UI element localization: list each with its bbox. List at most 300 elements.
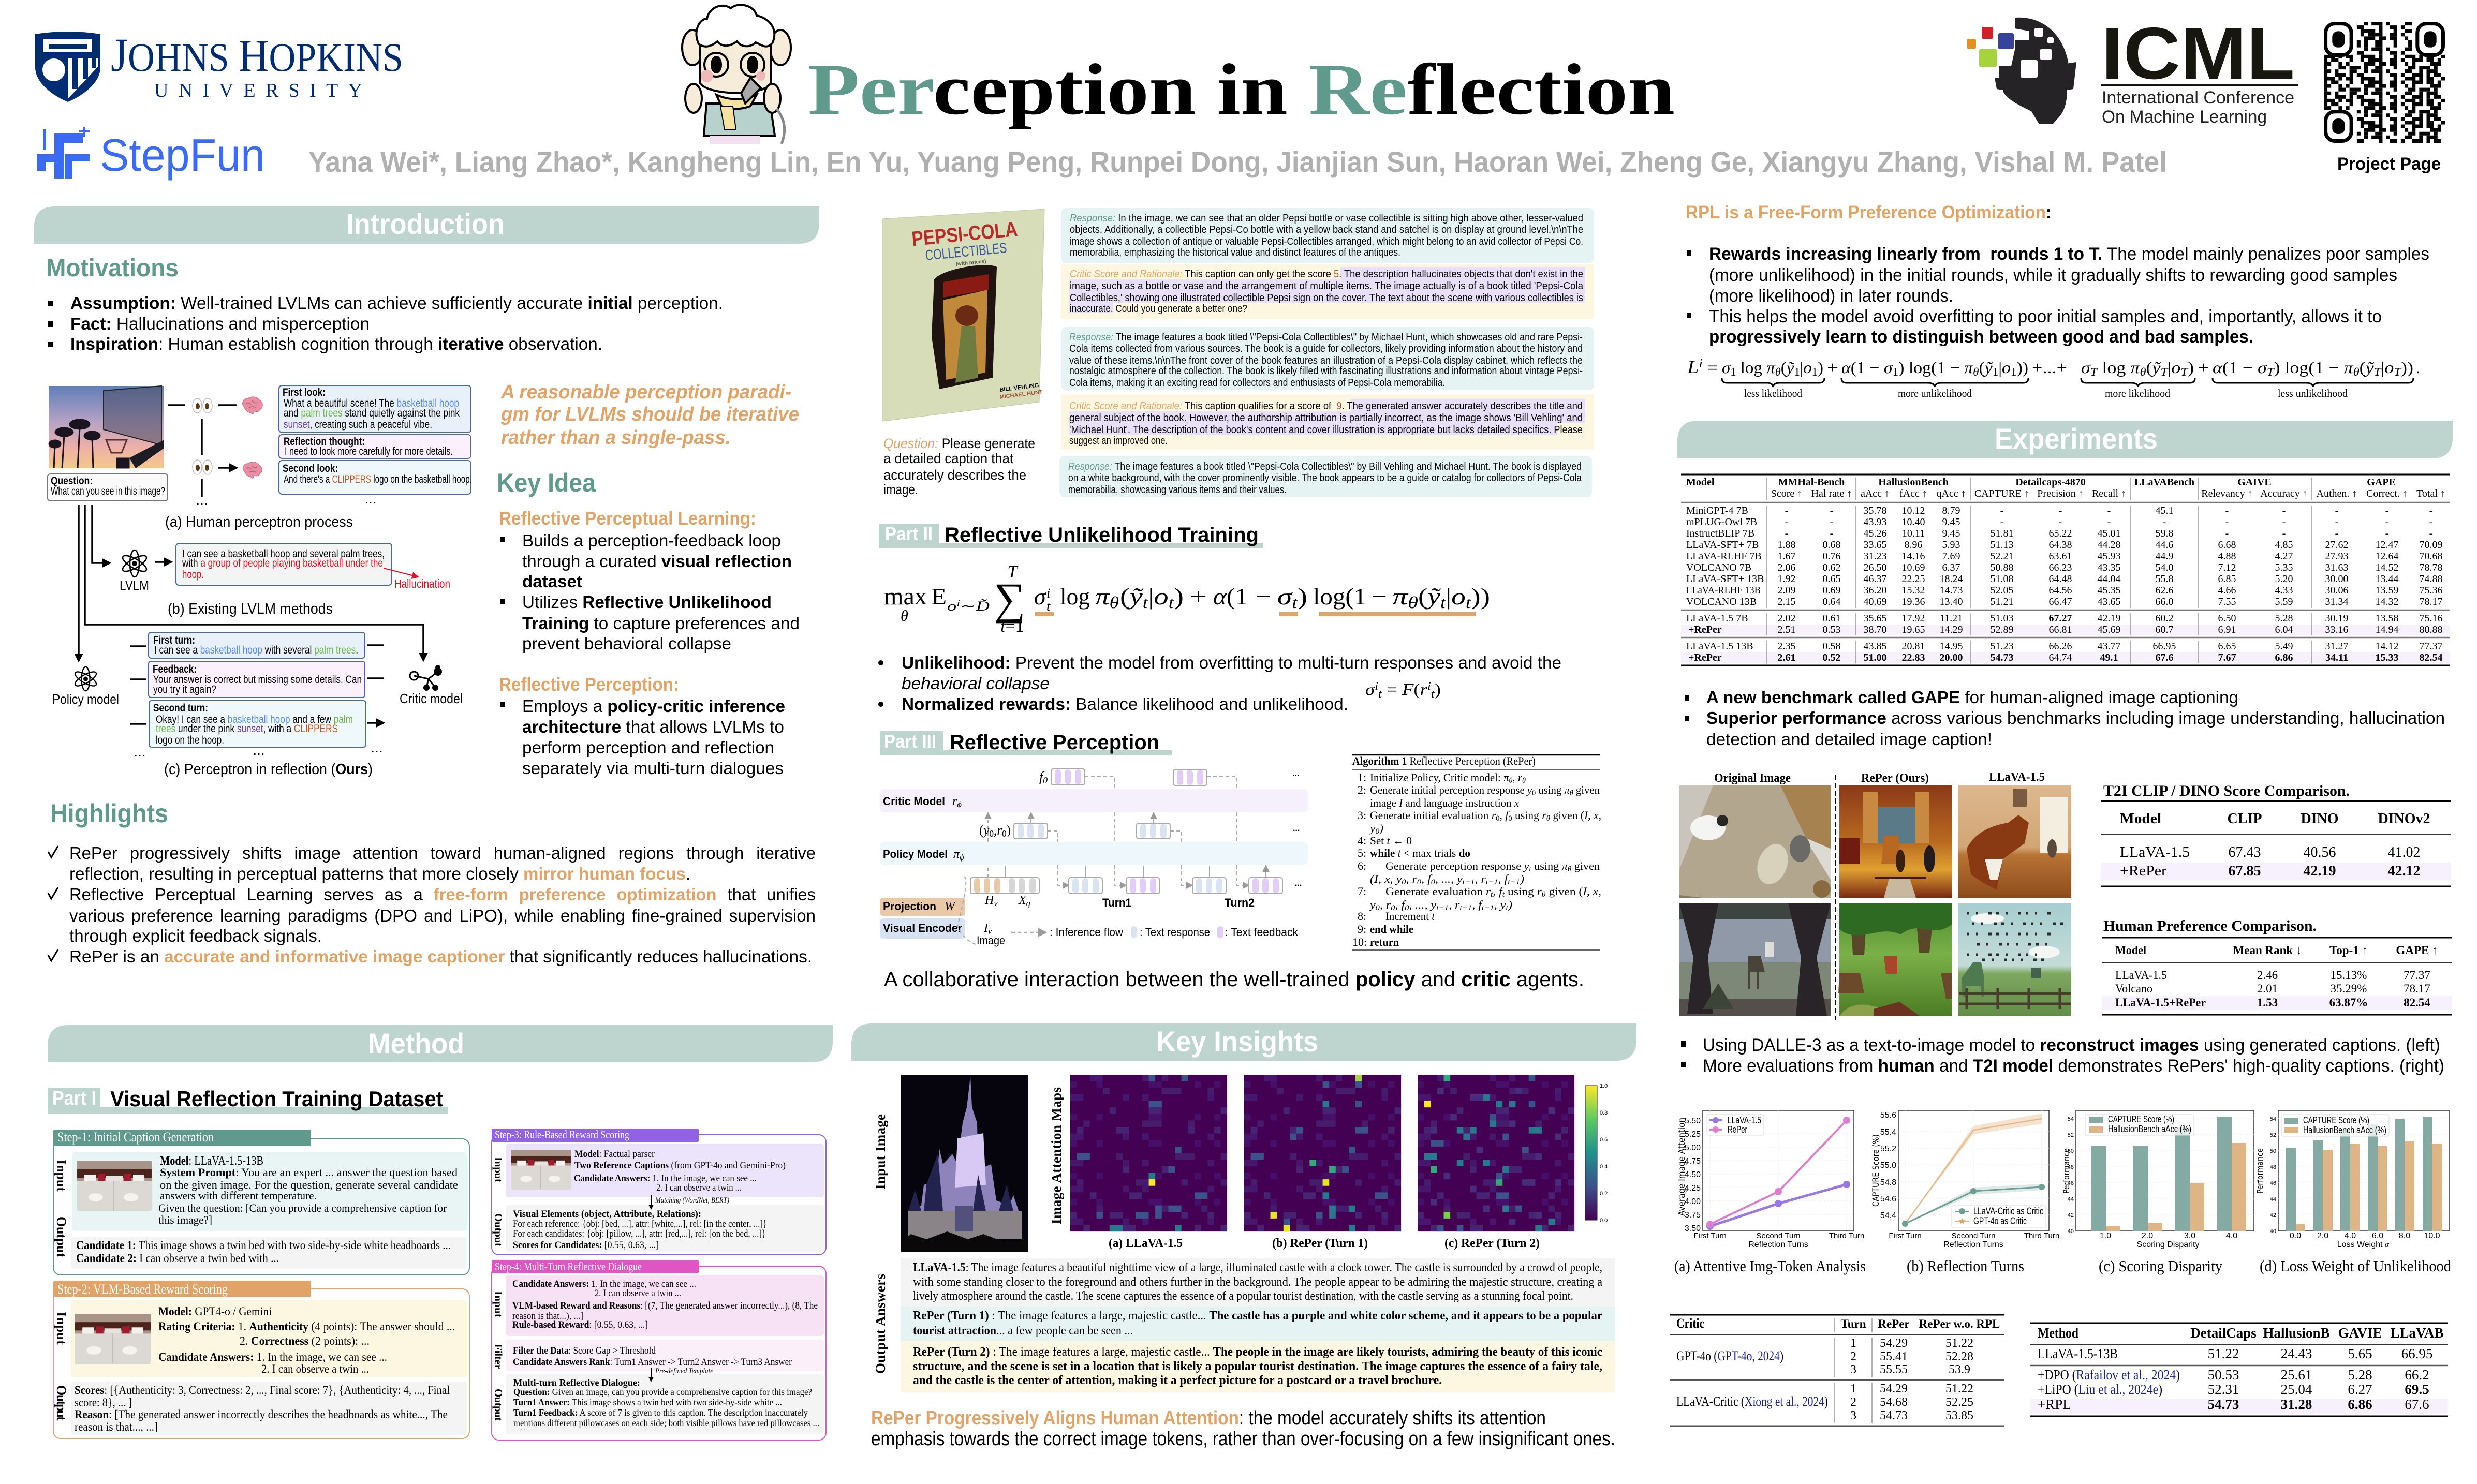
table rows: VOLCANO 13B [1686,596,1757,607]
box: first look: and palm trees stand quietly against the pink [284,407,460,419]
table rows: 70.09 [2419,539,2443,551]
bullets: unlikelihood and normalized rewards: Normalized rewards: Balance likelihood and unlikelihood. [902,694,1348,714]
table rows: 52.05 [1991,585,2013,596]
band: policy model: πϕ [953,848,964,862]
heading: Key Insights [851,1023,1636,1061]
table rows: - [2385,516,2388,528]
chart c legend: HallusionBench aAcc (%) [2108,1124,2191,1134]
table: preference method comparison: 24.43 [2281,1346,2312,1361]
table rows: 5.93 [1942,539,1960,551]
table: human preference comparison: 35.29% [2331,982,2367,995]
diagram labels: f0 [1039,769,1048,785]
panel: LLaVA-1.5 answer: with some standing closer to the foreground and others further in the background. The people appear to be admiring the majestic structure, creating a [913,1275,1602,1289]
image grid: text-to-image reconstructions [1679,770,2071,1020]
box: projection: W [945,900,956,913]
callout: reasonable paradigm: gm for LVLMs should be iterative [500,404,799,425]
step 4 labels [492,1291,505,1421]
table rows: LLaVA-1.5 13B [1686,641,1753,652]
chart a axes labels: Third Turn [1829,1231,1864,1240]
tokens [970,769,1282,894]
callout: reasonable paradigm: rather than a single-pass. [501,427,731,449]
key idea: reflective perceptual learning: prevent behavioral collapse [522,634,731,653]
response panel 2: Response: The image features a book titled \"Pepsi-Cola Collectibles\" by Michael Hunt, which showcases old and rare Pepsi- [1069,332,1583,343]
table rows: 45.69 [2097,624,2121,635]
algorithm box: image I and language instruction x [1370,796,1519,809]
step 2 output text: Scores: [{Authenticity: 3, Correctness: 2, ..., Final score: 7}, {Authenticity: 4, ..., Final [75,1384,450,1397]
chart a axes labels: Second Turn [1756,1231,1801,1240]
table rows: 2.15 [1777,596,1796,607]
chart a axes labels: Reflection Turns [1748,1240,1808,1249]
step 4 output text: Turn1 Answer: This image shows a twin bed with two side-by-side white ... [513,1397,782,1407]
chart c legend [2085,1114,2194,1135]
chart d axes labels: 52 [2270,1132,2276,1138]
box: LVLM output: with a group of people playing basketball under the [182,557,383,569]
band: policy model [880,842,1308,865]
table rows: 5.20 [2275,573,2293,585]
table: preference method comparison: 6.27 [2348,1382,2372,1397]
formula: RPL loss: α(1 − σ1) log(1 − πθ(ỹ1|o1)) [1841,358,2028,378]
table: preference method comparison: LLaVAB [2390,1325,2444,1341]
callout: hallucination [384,568,450,590]
table rows: 9.45 [1942,528,1960,539]
table rows: - [2429,505,2432,516]
table rows: - [2107,505,2111,516]
logo: StepFun [37,127,265,181]
table header: aAcc ↑ [1861,488,1890,499]
table: preference method comparison: +DPO (Rafailov et al., 2024) [2038,1367,2180,1383]
rotated labels: Image Attention Maps [1049,1087,1064,1224]
box: first turn: I can see a basketball hoop with several palm trees. [154,644,358,656]
table: critic comparison: 53.85 [1945,1409,1973,1422]
table rows: 13.40 [1940,596,1963,607]
panel: RePer turn 2 answer: and the castle is the center of attention, making it a perfect picture for a postcard or a travel brochure. [913,1374,1442,1387]
table rows: 14.73 [1940,585,1963,596]
ellipses in diagram: ... [371,739,383,755]
box: reflection thought: Reflection thought: [284,436,365,448]
critic panel 1 [1061,264,1594,319]
box: second turn: logo on the hoop. [156,734,224,746]
image: RePer living room [1839,785,1952,898]
chart d legend: CAPTURE Score (%) [2303,1115,2369,1125]
bullets: unlikelihood and normalized rewards: behavioral collapse [902,674,1050,693]
table rows: 46.37 [1863,573,1887,585]
table rows: LLaVA-SFT+ 13B [1686,573,1764,585]
table rows: LLaVA-1.5 7B [1686,613,1748,624]
table rows: 66.26 [2048,641,2072,652]
step 1 input text: answers with different temperature. [160,1189,317,1202]
step 1 input text: this image?] [158,1213,212,1226]
table: critic comparison [1670,1315,2004,1426]
image: Pepsi-Cola book: PEPSI-COLA [911,218,1019,250]
formula: RPL loss: less unlikelihood [2278,387,2348,399]
step 4 header: Step-4: Multi-Turn Reflective Dialogue [495,1260,642,1273]
table rows: 31.34 [2325,596,2349,607]
chart a legend: RePer [1728,1124,1747,1135]
heatmap captions: (c) RePer (Turn 2) [1444,1237,1540,1250]
table rows: 74.88 [2419,573,2443,585]
box: second look: Second look: [283,463,338,474]
table rows: 44.6 [2155,539,2174,551]
chart a axes labels [1677,1117,1864,1249]
chart d axes labels: 42 [2270,1212,2276,1219]
box: visual encoder [880,918,965,939]
chart a axes labels: 5.00 [1685,1144,1701,1152]
step 2 header: Step-2: VLM-Based Reward Scoring [57,1282,228,1297]
box: projection [880,898,965,916]
chart: loss weight [2255,1110,2449,1249]
colorbar [1585,1083,1608,1224]
table header: Relevancy ↑ [2201,488,2253,499]
algorithm box: 6: [1358,859,1366,872]
motivations bullet list: Assumption: Well-trained LVLMs can achieve sufficiently accurate initial perception. [70,293,723,313]
figure: perception diagram [48,385,472,778]
highlights checklist [48,843,816,966]
chart captions: (b) Reflection Turns [1907,1257,2024,1275]
step 2 input text: 2. Correctness (2 points): ... [240,1334,370,1347]
table rows: 0.62 [1823,562,1840,573]
table rows: LLaVA-RLHF 7B [1686,551,1762,562]
bullets: GAPE benchmark: A new benchmark called GAPE for human-aligned image captioning [1706,688,2238,707]
box: feedback: you try it again? [153,684,216,695]
step 1 input text: Model: LLaVA-1.5-13B [160,1154,263,1168]
table rows: 31.63 [2325,562,2349,573]
diagram labels: Iv [983,922,992,936]
authors: Yana Wei*, Liang Zhao*, Kangheng Lin, En Yu, Yuang Peng, Runpei Dong, Jianjian Sun, Haoran Wei, Zheng Ge, Xiangyu Zhang, Vishal M. Patel [308,145,2167,178]
chart b legend: GPT-4o as Critic [1973,1216,2027,1227]
bullets: GAPE benchmark: Superior performance across various benchmarks including image understanding, hallucination [1706,708,2445,728]
table rows: 4.66 [2218,585,2236,596]
logo: Johns Hopkins University [35,28,403,102]
box: first look: sunset, creating such a peaceful vibe. [284,419,432,431]
formula: reflective unlikelihood objective: − [1256,583,1271,610]
key insight conclusion: RePer Progressively Aligns Human Attention: the model accurately shifts its attention [871,1407,1546,1429]
box: second turn [149,701,366,747]
step 3 labels: Output [492,1213,505,1246]
table rows: - [2000,505,2003,516]
table: T2I CLIP DINO comparison: 67.43 [2229,844,2261,860]
table: human preference comparison: LLaVA-1.5+RePer [2115,996,2206,1009]
highlights checklist: various preference learning paradigms (DPO and LiPO), while enabling fine-grained supervision [69,906,816,925]
table rows: 7.55 [2218,596,2236,607]
table: critic comparison: 2 [1850,1350,1856,1363]
highlights checklist: reflection, resulting in perceptual patterns that more closely mirror human focus. [69,864,690,883]
table: human preference comparison: 1.53 [2257,996,2278,1009]
table rows: - [2225,528,2229,539]
chart b axes labels: Second Turn [1951,1231,1996,1240]
table rows: 12.64 [2376,551,2398,562]
table rows: 51.00 [1863,652,1887,663]
chart b legend: LLaVA-Critic as Critic [1973,1206,2043,1217]
formula: RPL loss: σT log πθ(ỹT|oT) [2081,358,2194,378]
colorbar: 0.2 [1600,1191,1608,1197]
table rows: 55.8 [2155,573,2174,585]
chart a axes labels: 4.25 [1685,1184,1701,1193]
chart d axes labels: 2.0 [2317,1231,2328,1240]
table: preference method comparison: 50.53 [2208,1367,2239,1383]
table: preference method comparison: 31.28 [2281,1397,2312,1412]
table: preference method comparison: 52.31 [2208,1382,2239,1397]
table header: Detailcaps-4870 [2015,477,2086,488]
box: second turn: Okay! I can see a basketball hoop and a few palm [156,714,353,725]
response panel 3 [1059,456,1592,497]
table rows: 18.24 [1940,573,1963,585]
table rows: 33.65 [1863,539,1887,551]
table rows: 38.70 [1863,624,1887,635]
image: RePer forest deer [1838,903,1952,1016]
heading: RPL free-form optimization: RPL is a Free-Form Preference Optimization: [1686,202,2052,222]
colorbar: 0.4 [1600,1164,1608,1170]
callout: reasonable paradigm: A reasonable perception paradi- [500,381,791,403]
response panel 1: image shows a collection of antique or valuable Pepsi-Collectibles arranged, which might belong to an avid collector of Pepsi Co. [1070,236,1583,247]
caption c: (c) Perceptron in reflection (Ours) [164,761,373,778]
table rows: 2.61 [1777,652,1796,663]
step 1 input text: System Prompt: You are an expert ... answer the question based [160,1166,458,1179]
table rows: 64.56 [2048,585,2072,596]
chart c axes labels [2061,1116,2237,1249]
bullets: unlikelihood and normalized rewards [878,653,1561,714]
table: human preference comparison: Model [2115,944,2146,957]
logo: Johns Hopkins University: UNIVERSITY [154,80,362,101]
table rows: 30.19 [2325,613,2349,624]
response panel 1 [1061,208,1594,263]
chart a axes labels: 4.50 [1685,1170,1701,1179]
critic panel 1: Critic Score and Rationale: This caption can only get the score 5. The description hallucinates objects that don't exist in the [1070,269,1583,280]
table: preference method comparison: 69.5 [2405,1382,2429,1397]
image: bed [75,1314,151,1364]
chart d axes labels: 46 [2270,1180,2276,1186]
chart c axes labels: 3.0 [2184,1231,2195,1240]
chart b axes labels: 55.4 [1880,1128,1896,1137]
table: preference method comparison: +LiPO (Liu et al., 2024e) [2038,1382,2162,1397]
key idea: reflective perceptual learning: dataset [522,572,582,591]
response panel 2: nostalgic atmosphere of the collection. The book is likely filled with fascinating illustrations and information about vintage Pepsi- [1069,365,1583,377]
step 4 filter text: Candidate Answers Rank: Turn1 Answer -> Turn2 Answer -> Turn3 Answer [513,1357,792,1368]
step 3 input text: Two Reference Captions (from GPT-4o and Gemini-Pro) [574,1160,786,1171]
algorithm box: y0, r0, f0, ..., y t−1, rt−1, ft−1, yt) [1369,898,1512,912]
table: T2I CLIP DINO comparison: +RePer [2120,863,2167,879]
chart captions: (d) Loss Weight of Unlikelihood [2260,1257,2451,1275]
table header: qAcc ↑ [1936,488,1966,499]
table rows: 78.78 [2419,562,2443,573]
step 4 input text: 2. I can observe a twin ... [595,1288,681,1299]
step 2 output text: reason is that..., ...] [75,1420,158,1433]
table: critic comparison: 3 [1850,1363,1856,1376]
critic panel 1: image, such as a bottle or vase and the arrangement of multiple items. The image actually is of a book titled 'Pepsi-Cola [1070,280,1584,292]
critic panel 1: inaccurate. Could you generate a better one? [1070,303,1247,315]
step 4 input text: VLM-based Reward and Reasons: [(7, The generated answer incorrectly...), (8, The [512,1300,818,1311]
table rows: 14.94 [2376,624,2398,635]
diagram labels [977,769,1302,947]
table: human preference comparison [2102,917,2452,1015]
box: feedback: Feedback: [153,663,197,675]
chart b axes labels: 54.8 [1880,1178,1896,1187]
RPL bullets: (more likelihood) in later rounds. [1709,286,1953,306]
RPL bullets: This helps the model avoid overfitting to poor initial samples and, importantly, allows it to [1709,307,2382,327]
table rows: - [1785,528,1788,539]
table rows: 4.27 [2275,551,2293,562]
table: critic comparison: 52.28 [1945,1350,1973,1363]
table: preference method comparison: 51.22 [2208,1346,2239,1361]
table rows: 66.23 [2048,562,2072,573]
table rows: 10.40 [1901,516,1925,528]
table rows: - [2335,516,2338,528]
formula: reflective unlikelihood objective: + [1190,583,1207,610]
algorithm box: Set t ← 0 [1370,834,1412,847]
algorithm box: 7: [1358,885,1366,898]
table rows: 82.54 [2419,652,2443,663]
text block: question: Question: Please generate [883,436,1035,451]
step 4 output text: Question: Given an image, can you provide a comprehensive caption for this image? [513,1387,812,1397]
response panel 2: value of these items.\n\nThe front cover of the book features an illustration of a Pepsi-Cola display cabinet, which reflects the [1069,355,1583,366]
chart a axes labels: 3.50 [1685,1224,1701,1233]
key idea: reflective perception: Reflective Perception: [499,674,679,695]
table rows: - [2163,516,2166,528]
QR code [2324,22,2445,174]
chart c axes labels: 2.0 [2142,1231,2153,1240]
heading: Part II: Reflective Unlikelihood Training [945,524,1259,546]
logo: StepFun: StepFun [100,129,265,181]
step 3 output text: For each candidates: {obj: [pillow, ...], attr: [red,...], rel: [on the bed, ...]} [513,1228,766,1239]
table: human preference comparison: LLaVA-1.5 [2115,969,2167,982]
logo: ICML: On Machine Learning [2102,107,2267,127]
chart b axes labels: 55.2 [1880,1145,1896,1153]
table rows: 2.02 [1777,613,1796,624]
heatmap: RePer turn 1 [1244,1075,1401,1231]
table rows: 19.65 [1901,624,1925,635]
chart c legend: CAPTURE Score (%) [2108,1114,2174,1124]
table rows: 51.81 [1991,528,2013,539]
table header: MMHal-Bench [1778,477,1845,488]
table: preference method comparison: GAVIE [2338,1325,2382,1341]
heatmap captions: (b) RePer (Turn 1) [1272,1237,1368,1250]
algorithm box: 5: [1358,847,1366,859]
QR code: Project Page [2337,154,2441,174]
table rows: 22.25 [1901,573,1925,585]
bullets: DALLE-3 evaluations [1681,1035,2444,1076]
table: human preference comparison: 2.46 [2257,969,2278,982]
step 3 input text: 2. I can observe a twin ... [656,1182,742,1193]
chart d axes labels: 10.0 [2424,1231,2440,1240]
diagram labels: Hv [984,894,998,908]
chart d axes labels: 8.0 [2399,1231,2410,1240]
table: critic comparison: GPT-4o (GPT-4o, 2024) [1676,1348,1783,1363]
key idea: reflective perception [499,674,785,778]
table: human preference comparison: Volcano [2115,982,2152,995]
algorithm box: Generate initial evaluation r0, f0 using rθ given (I, x, [1370,809,1601,823]
table rows: 14.16 [1901,551,1925,562]
caption b: (b) Existing LVLM methods [168,601,333,617]
algorithm box: end while [1370,923,1413,936]
chart c axes labels: 46 [2068,1180,2074,1186]
table rows: 5.49 [2275,641,2293,652]
chart captions: (c) Scoring Disparity [2099,1257,2222,1275]
table rows: 51.23 [1991,641,2013,652]
formula: reflective unlikelihood objective: σ [1034,583,1047,610]
table rows: 64.48 [2048,573,2072,585]
table rows: 42.19 [2097,613,2121,624]
icon: policy model [52,667,119,707]
table rows: 66.47 [2048,596,2072,607]
table rows: - [2225,505,2229,516]
table rows: 15.32 [1901,585,1925,596]
table rows: 17.92 [1901,613,1925,624]
box: question: Question: [51,475,93,487]
table rows: 43.93 [1863,516,1887,528]
diagram labels: (y0,r0) [979,823,1011,839]
table rows: 14.29 [1940,624,1963,635]
highlights checklist: RePer is an accurate and informative image captioner that significantly reduces hallucinations. [69,947,812,966]
table header: Correct. ↑ [2366,488,2408,499]
diagram: reflective perception architecture [880,769,1308,947]
formula: reflective unlikelihood objective: (ỹt|ot)) [1418,583,1490,612]
table rows: 13.58 [2376,613,2398,624]
chart c axes labels: Performance [2061,1148,2071,1194]
table rows: 30.06 [2325,585,2349,596]
heading: Key Idea: Key Idea [497,468,596,497]
chart b axes labels: First Turn [1889,1231,1922,1240]
table rows: - [2335,505,2338,516]
RPL bullets: (more unlikelihood) in the initial rounds, while it gradually shifts to rewarding good samples [1709,265,2397,285]
table: T2I CLIP DINO comparison: 42.12 [2388,863,2420,879]
table rows: 35.65 [1863,613,1887,624]
text block: question: image. [883,482,918,497]
table rows: 52.21 [1991,551,2013,562]
table rows: 65.22 [2048,528,2072,539]
table rows: 9.45 [1942,516,1960,528]
table rows: 27.62 [2325,539,2349,551]
box: question: What can you see in this image? [51,485,165,497]
table: T2I CLIP DINO comparison: DINO [2301,811,2339,827]
step 2 output text: score: 8}, ... ] [75,1396,132,1409]
image: Pepsi-Cola book: BILL VEHLING [999,382,1039,393]
table rows: 0.68 [1823,539,1840,551]
table: T2I CLIP DINO comparison: DINOv2 [2378,811,2430,827]
table header: Hal rate ↑ [1811,488,1852,499]
table rows: - [2000,516,2003,528]
image: original hallway [1679,785,1831,898]
diagram labels: Xq [1018,894,1030,908]
table rows: 75.36 [2419,585,2443,596]
bullets: GAPE benchmark: detection and detailed image caption! [1706,730,1992,749]
step 4 input text [512,1279,818,1330]
table: human preference comparison: 82.54 [2404,996,2430,1009]
caption a: (a) Human perceptron process [165,514,353,530]
box: question [48,474,168,501]
chart a axes labels: 4.75 [1685,1157,1701,1166]
diagram labels: ... [1292,769,1299,778]
table rows: - [2107,516,2111,528]
image: basketball hoop at sunset [49,386,164,468]
legend: : Text response [1140,926,1210,939]
table rows: 0.69 [1823,585,1840,596]
table rows: 10.69 [1901,562,1925,573]
key idea: reflective perception: separately via multi-turn dialogues [522,759,784,778]
key insight conclusion: emphasis towards the correct image tokens, rather than over-focusing on a few insignificant ones. [871,1428,1615,1450]
table rows: 1.67 [1777,551,1796,562]
table rows: 67.27 [2048,613,2072,624]
band: critic model: Critic Model [883,795,945,808]
table header: fAcc ↑ [1899,488,1927,499]
algorithm box: Generate evaluation rt, ft using rθ given (I, x, [1385,885,1601,899]
table rows: 45.93 [2097,551,2121,562]
step 4 filter text: Filter the Data: Score Gap > Threshold [513,1345,656,1356]
table rows: 2.06 [1777,562,1796,573]
table: T2I CLIP DINO comparison: LLaVA-1.5 [2120,844,2190,860]
table rows: 80.88 [2419,624,2443,635]
table: critic comparison: 54.29 [1880,1337,1908,1350]
legend: : Text feedback [1225,926,1299,939]
table rows: LLaVA-SFT+ 7B [1686,539,1759,551]
